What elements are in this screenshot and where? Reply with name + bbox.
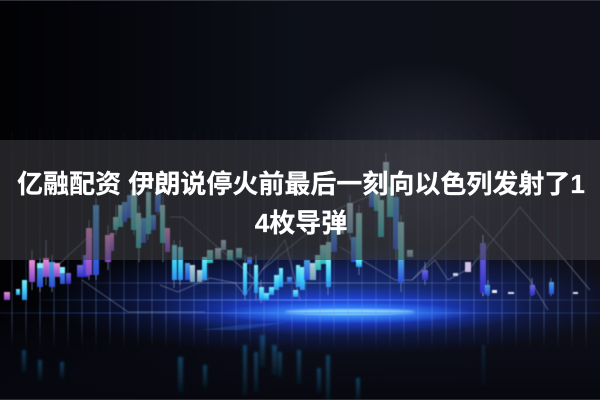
title: 亿融配资 伊朗说停火前最后一刻向以色列发射了1 <box>17 169 585 199</box>
candlesticks: right cluster <box>407 235 578 296</box>
reflected candlesticks <box>22 335 485 400</box>
candlesticks: centre cluster <box>172 153 483 303</box>
reflection glow <box>40 245 600 355</box>
trend lines <box>55 195 590 312</box>
candlesticks: left cluster <box>4 175 170 300</box>
grid lines <box>0 130 600 350</box>
translucent title band <box>0 140 600 260</box>
title <box>17 169 585 238</box>
title: 4枚导弹 <box>255 208 347 238</box>
